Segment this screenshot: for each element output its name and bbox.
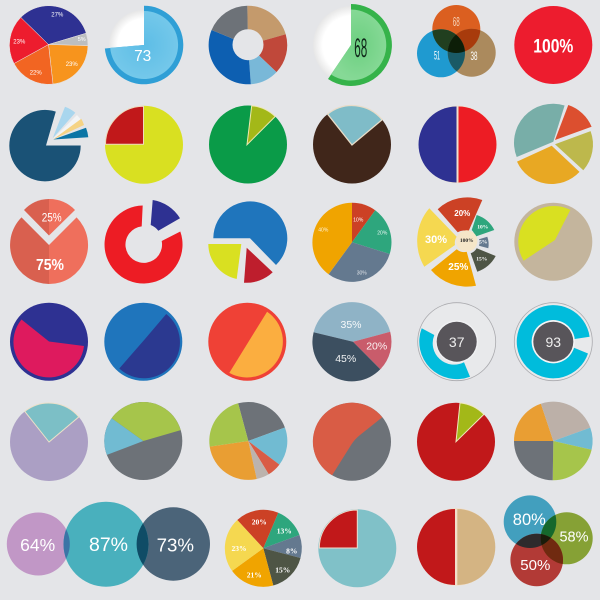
pie: 35%, 20%, 45%: 45%	[335, 353, 356, 365]
exploded donut: red and navy	[105, 200, 183, 283]
badge: 100%	[514, 6, 592, 84]
exploded pie: 25% and 75%: 25%	[42, 212, 62, 224]
radial gauge: 93	[514, 303, 592, 381]
pie: red ring with orange half	[208, 303, 286, 381]
pie: lavender with teal wedge	[10, 403, 88, 481]
venn diagram: 68, 51, 38: 51	[434, 49, 440, 63]
pie: red and tan halves	[417, 508, 495, 586]
radial exploded chart: 100% hub with six slices: 10%	[477, 224, 488, 230]
pie: 35%, 20%, 45%: 20%	[366, 341, 387, 353]
pie: six slices with serif percentages: 20%	[252, 518, 267, 526]
overlapping circles: 64%, 87%, 73%: 73%	[157, 534, 194, 556]
pie: six slices with serif percentages: 23%	[232, 544, 246, 553]
pie: 35%, 20%, 45%	[312, 302, 391, 381]
radial gauge: 37: 37	[449, 334, 465, 350]
radial exploded chart: 100% hub with six slices: 30%	[425, 234, 447, 246]
pie: four slices with percentages: 10%	[353, 218, 364, 224]
venn diagram: 80%, 58%, 50%: 80%	[513, 511, 546, 529]
pie: six slices with serif percentages: 15%	[275, 566, 290, 574]
pie: six slices with serif percentages: 13%	[277, 526, 292, 536]
pie: four slices with percentages: 30%	[357, 270, 367, 276]
overlapping circles: 64%, 87%, 73%: 64%	[20, 535, 55, 555]
radial gauge: 37	[418, 303, 496, 381]
venn diagram: 80%, 58%, 50%	[504, 495, 593, 586]
gauge chart: 68	[313, 4, 392, 86]
pie chart: five slices with percentages: 22%	[30, 71, 42, 77]
venn diagram: 68, 51, 38: 68	[453, 14, 460, 29]
pie: six slices with serif percentages: 21%	[247, 570, 262, 580]
pie: six slices with serif percentages	[225, 510, 302, 587]
gauge chart: 73: 73	[134, 48, 151, 65]
pie: five slices	[514, 402, 593, 480]
exploded pie: navy with wedges	[9, 107, 88, 181]
radial exploded chart: 100% hub with six slices: 100%	[460, 238, 474, 244]
radial exploded chart: 100% hub with six slices: 20%	[454, 209, 470, 218]
venn diagram: 80%, 58%, 50%: 50%	[520, 557, 550, 574]
exploded pie: 25% and 75%: 75%	[36, 257, 64, 274]
radial exploded chart: 100% hub with six slices: 15%	[476, 256, 487, 262]
pie: four slices with percentages: 20%	[377, 231, 388, 237]
pie chart: five slices with percentages	[9, 6, 88, 84]
pie: teal with red quarter	[318, 509, 396, 587]
radial exploded chart: 100% hub with six slices: 25%	[448, 262, 468, 273]
pie: tan with yellow slice	[514, 203, 592, 281]
exploded pie: 25% and 75%	[10, 199, 88, 284]
pie: yellow with red quarter	[105, 106, 183, 184]
pie: six slices	[209, 402, 287, 480]
pie chart: five slices with percentages: 23%	[13, 40, 26, 46]
pie: navy ring with pink slice	[10, 303, 88, 381]
pie: green, blue, gray	[104, 402, 182, 480]
pie: 35%, 20%, 45%: 35%	[340, 319, 362, 331]
radial gauge: 93: 93	[546, 334, 561, 350]
radial exploded chart: 100% hub with six slices	[417, 197, 496, 287]
pie: coral and gray	[313, 403, 391, 481]
exploded pie: four slices	[514, 104, 593, 184]
exploded pie: blue, yellow, dark red	[208, 201, 287, 283]
pie chart: five slices with percentages: 23%	[66, 62, 78, 68]
pie: four slices with percentages: 40%	[318, 228, 329, 234]
pie: blue and red halves	[419, 106, 497, 183]
overlapping circles: 64%, 87%, 73%	[7, 502, 210, 587]
venn diagram: 68, 51, 38	[417, 5, 496, 77]
gauge chart: 68: 68	[354, 33, 367, 63]
venn diagram: 80%, 58%, 50%: 58%	[559, 530, 589, 546]
pie: six slices with serif percentages: 8%	[286, 546, 297, 556]
badge: 100%: 100%	[533, 36, 573, 58]
pie: brown with teal wedge	[313, 106, 391, 184]
pie: red with green wedge	[417, 403, 495, 481]
venn diagram: 68, 51, 38: 38	[470, 49, 478, 63]
pie chart: five slices with percentages: 5%	[78, 37, 86, 43]
radial exploded chart: 100% hub with six slices: 5%	[479, 239, 487, 245]
overlapping circles: 64%, 87%, 73%: 87%	[89, 534, 128, 556]
pie: green with olive wedge	[209, 106, 287, 184]
pie: blue ring with dark blue half	[104, 303, 182, 381]
donut chart: five segments	[209, 6, 287, 84]
pie: four slices with percentages	[312, 203, 391, 282]
gauge chart: 73	[105, 6, 183, 84]
pie chart: five slices with percentages: 27%	[51, 12, 64, 18]
